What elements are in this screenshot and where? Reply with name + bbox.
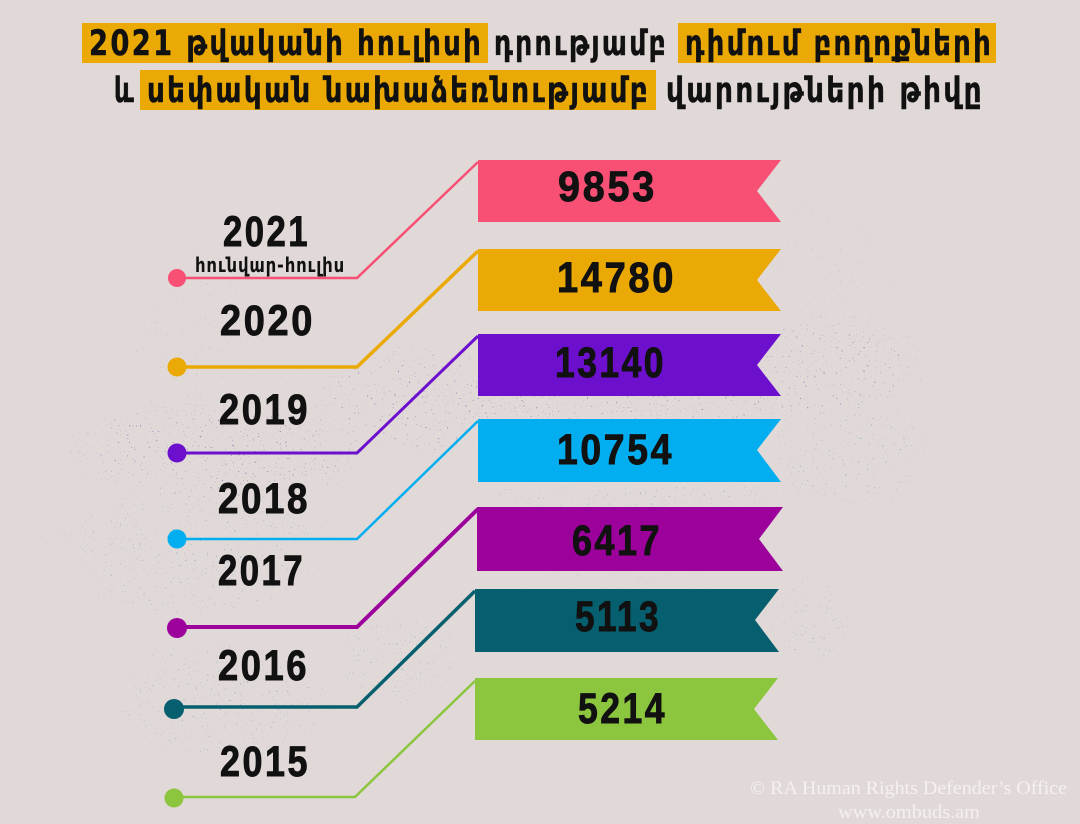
row: 2019: 13140	[555, 339, 666, 387]
title: դիմում բողոքների	[685, 24, 993, 64]
copyright footer: www.ombuds.am	[838, 802, 980, 823]
title: դրությամբ	[494, 24, 668, 64]
row: 2019	[168, 334, 781, 462]
row: 2021: 2021	[223, 208, 310, 256]
row: 2018: 2018	[218, 475, 310, 523]
row: 2021: հունվար-հուլիս	[195, 253, 345, 277]
row: 2016: 2016	[218, 642, 309, 690]
row: 2018: 10754	[557, 426, 674, 474]
row: 2017: 6417	[572, 517, 662, 565]
row: 2020	[168, 249, 781, 376]
title: 2021 թվականի հուլիսի	[89, 24, 483, 64]
row: 2020: 14780	[557, 254, 676, 302]
title: վարույթների թիվը	[666, 71, 984, 111]
row: 2017: 2017	[218, 547, 305, 595]
row: 2015: 5214	[578, 685, 667, 733]
copyright footer	[750, 778, 1067, 823]
row: 2018	[168, 419, 781, 548]
copyright footer: © RA Human Rights Defender’s Office	[750, 778, 1067, 799]
title	[82, 23, 996, 111]
row: 2016	[164, 589, 779, 719]
row: 2021: 9853	[558, 163, 657, 211]
row: 2017	[167, 507, 783, 638]
row: 2019: 2019	[219, 386, 310, 434]
row: 2016: 5113	[575, 593, 661, 641]
row: 2015	[164, 678, 778, 808]
row: 2021	[168, 160, 781, 287]
title: և	[114, 71, 136, 111]
row: 2015: 2015	[220, 738, 310, 786]
title: սեփական նախաձեռնությամբ	[147, 71, 650, 111]
row: 2020: 2020	[220, 297, 315, 345]
